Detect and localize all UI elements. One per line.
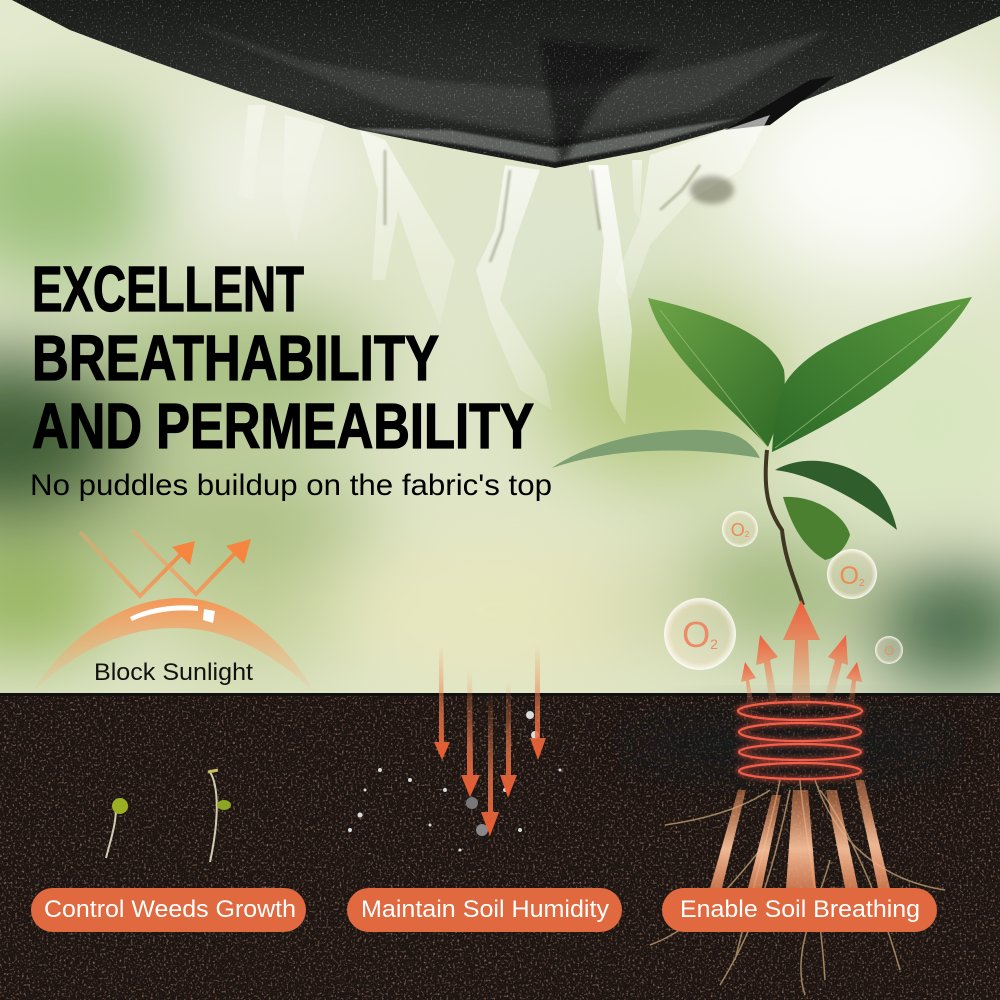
pill: maintain soil humidity: Maintain Soil Humidity bbox=[361, 896, 610, 923]
plant with leaves bbox=[552, 297, 972, 605]
oxygen bubbles: O bbox=[682, 614, 710, 655]
roots bbox=[650, 780, 945, 995]
heading bbox=[32, 253, 534, 462]
oxygen bubbles: 2 bbox=[745, 530, 750, 539]
down arrows: humidity bbox=[434, 645, 546, 836]
label: block sunlight: Block Sunlight bbox=[94, 659, 253, 686]
heading: AND PERMEABILITY bbox=[32, 390, 534, 462]
subheading: No puddles buildup on the fabric's top bbox=[30, 469, 552, 502]
oxygen bubbles bbox=[664, 511, 903, 670]
soil ground bbox=[0, 693, 1000, 1000]
heading: BREATHABILITY bbox=[32, 322, 439, 394]
pill: enable soil breathing bbox=[662, 888, 937, 932]
oxygen bubbles: O bbox=[731, 520, 745, 540]
rings around stem bbox=[738, 702, 862, 779]
oxygen bubbles: 2 bbox=[859, 578, 865, 589]
water streams bbox=[238, 105, 770, 425]
up arrows: soil breathing bbox=[741, 600, 862, 715]
water droplets in soil bbox=[348, 711, 562, 852]
pill: enable soil breathing: Enable Soil Breathing bbox=[680, 896, 920, 923]
background: blurred foliage bbox=[0, 0, 1000, 700]
fabric sagging overhead bbox=[0, 0, 1000, 175]
seedlings bbox=[106, 770, 231, 862]
heading: EXCELLENT bbox=[32, 253, 304, 325]
pill: maintain soil humidity bbox=[347, 888, 622, 932]
oxygen bubbles: 2 bbox=[710, 636, 718, 652]
icon: block sunlight bbox=[32, 530, 314, 693]
pill: control weeds growth: Control Weeds Growth bbox=[44, 896, 296, 923]
oxygen bubbles: O bbox=[884, 643, 894, 658]
pill: control weeds growth bbox=[31, 888, 306, 932]
oxygen bubbles: O bbox=[839, 562, 859, 590]
